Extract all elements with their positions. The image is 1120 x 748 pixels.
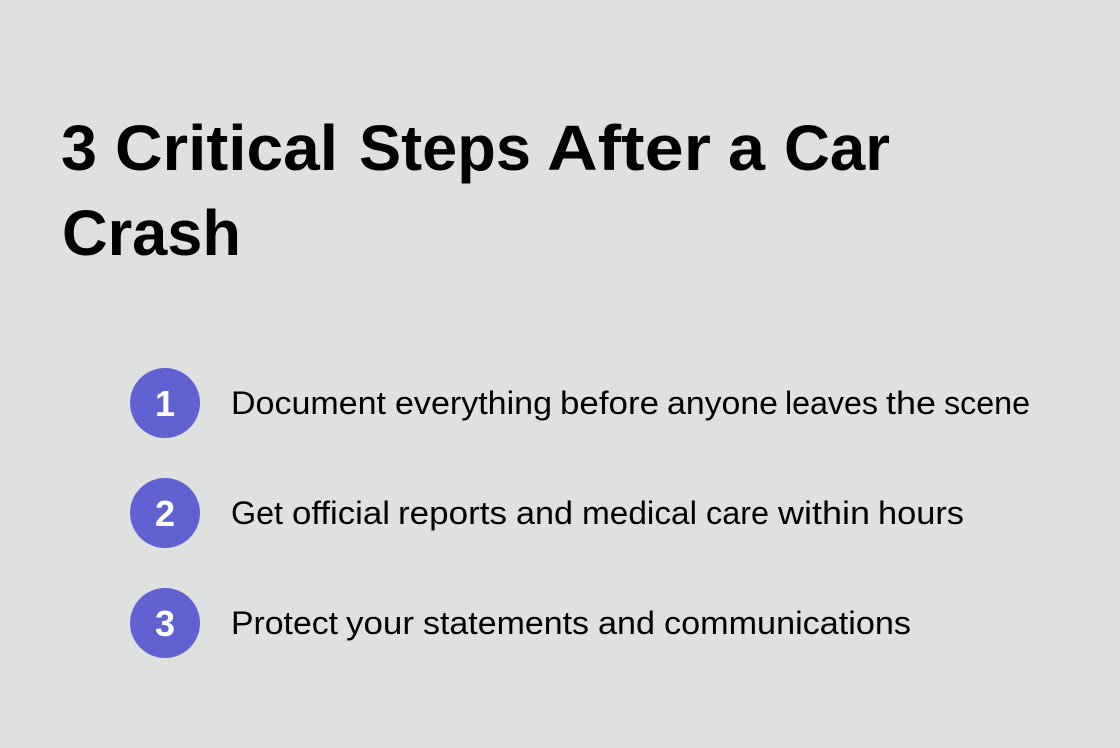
step 2 text: medical — [582, 495, 697, 531]
step 1 text: leaves — [785, 385, 878, 421]
step 1 text: before — [560, 385, 659, 421]
step 1 text: scene — [944, 385, 1030, 421]
step 1 badge — [130, 368, 200, 438]
step 2 text: official — [292, 495, 390, 531]
title: Car — [784, 112, 890, 184]
step 3 text: statements — [423, 605, 589, 641]
title: Critical — [115, 112, 338, 184]
step 3 text: your — [346, 605, 414, 641]
step 2 text: and — [516, 495, 573, 531]
step 1 text: Document — [231, 385, 386, 421]
step 2 text: reports — [398, 495, 507, 531]
step 3 text: communications — [664, 605, 911, 641]
title: 3 — [61, 112, 97, 184]
step 1 badge: 1 — [155, 383, 175, 424]
step 2 badge: 2 — [155, 493, 175, 534]
title: After — [547, 112, 711, 184]
step 2 text: Get — [231, 495, 283, 531]
step 1 text: the — [886, 385, 936, 421]
step 3 badge — [130, 588, 200, 658]
title: Crash — [62, 197, 241, 269]
step 2 text: hours — [878, 495, 964, 531]
title: a — [728, 112, 765, 184]
step 2 text: care — [706, 495, 769, 531]
step 3 badge: 3 — [155, 603, 175, 644]
step 1 text: anyone — [667, 385, 778, 421]
title: Steps — [359, 112, 531, 184]
step 3 text: Protect — [231, 605, 338, 641]
title — [61, 112, 890, 269]
step 3 text: and — [598, 605, 655, 641]
step 2 badge — [130, 478, 200, 548]
step 3 — [130, 588, 911, 658]
step 2 text: within — [777, 495, 870, 531]
step 2 — [130, 478, 964, 548]
step 1 text: everything — [395, 385, 552, 421]
step 1 — [130, 368, 1030, 438]
